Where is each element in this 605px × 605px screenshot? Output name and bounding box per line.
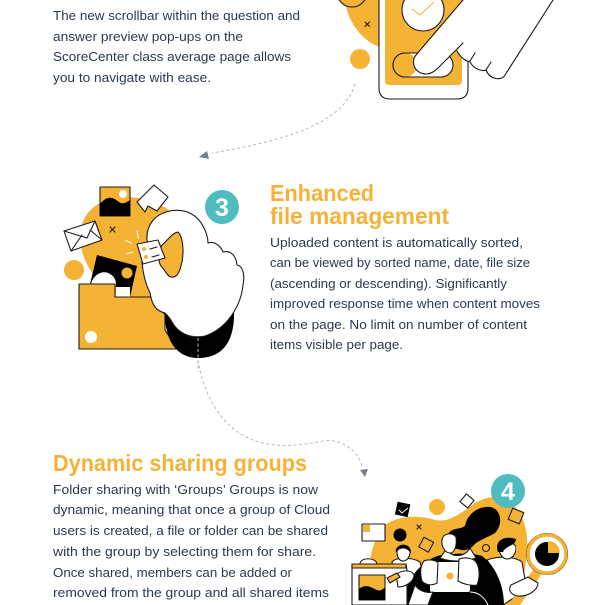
text block: sharing groups description: removed from the group and all shared items	[53, 586, 329, 600]
magnifying glass with pie chart	[508, 534, 568, 605]
icon: number 3 badge	[205, 190, 239, 224]
icon: number 4 badge	[491, 474, 525, 508]
text block: scrollbar description	[53, 9, 300, 85]
right person	[487, 538, 530, 605]
icon: folder	[79, 284, 177, 349]
text block: sharing groups description: Folder sharing with ‘Groups’ Groups is now	[53, 483, 319, 497]
icon: number 4 badge: 4	[501, 478, 515, 506]
icon: group of people sharing	[352, 494, 568, 605]
tablet	[430, 562, 470, 592]
icon: envelope	[64, 221, 102, 251]
orange blob	[369, 497, 527, 605]
floating checkboxes	[395, 494, 524, 552]
heading: Enhanced file management: Enhanced	[270, 180, 374, 206]
heading: Enhanced file management	[270, 180, 449, 229]
text block: file management description: Uploaded content is automatically sorted,	[270, 236, 523, 250]
text block: sharing groups description: dynamic, meaning that once a group of Cloud	[53, 503, 330, 517]
icon: black cuff	[165, 310, 234, 358]
icon: black photograph	[90, 255, 137, 297]
text block: scrollbar description: The new scrollbar within the question and	[53, 9, 300, 23]
icon: hand tapping phone scrollbar	[337, 0, 553, 99]
text block: file management description: items visible per page.	[270, 338, 403, 352]
text block: scrollbar description: you to navigate with ease.	[53, 71, 211, 85]
text block: sharing groups description: with the group by selecting them for share.	[52, 545, 316, 559]
icon: hand picking card from folder	[64, 185, 244, 372]
text block: file management description: (ascending or descending). Significantly	[270, 277, 508, 291]
icon: small card	[137, 240, 165, 264]
icon: orange gap between finger and thumb	[159, 232, 183, 277]
icon: picture frame	[100, 187, 130, 216]
arrow: dashed connector from 2 to 3	[199, 84, 355, 159]
arrow: dashed connector from 3 to 4	[198, 360, 368, 477]
icon: number 3 badge: 3	[215, 194, 229, 222]
text block: scrollbar description: ScoreCenter class average page allows	[53, 50, 291, 64]
text block: sharing groups description	[52, 483, 330, 600]
text block: sharing groups description: users is created, a file or folder can be shared	[53, 524, 328, 538]
icon: paper note	[137, 185, 168, 212]
central woman	[402, 507, 504, 605]
text block: scrollbar description: answer preview pop-ups on the	[53, 30, 243, 44]
hands	[421, 560, 438, 585]
small window	[362, 524, 385, 541]
text block: file management description: improved response time when content moves	[270, 297, 540, 311]
icon: white hand	[142, 210, 244, 337]
text block: file management description: can be viewed by sorted name, date, file size	[270, 256, 530, 270]
heading: Enhanced file management: file management	[270, 203, 449, 229]
text block: file management description	[270, 236, 540, 352]
heading: Dynamic sharing groups: Dynamic sharing groups	[53, 450, 307, 476]
left person	[392, 528, 424, 578]
text block: file management description: on the page. No limit on number of content	[270, 318, 528, 332]
left folder with picture	[352, 559, 414, 605]
text block: sharing groups description: Once shared, members can be added or	[53, 566, 292, 580]
